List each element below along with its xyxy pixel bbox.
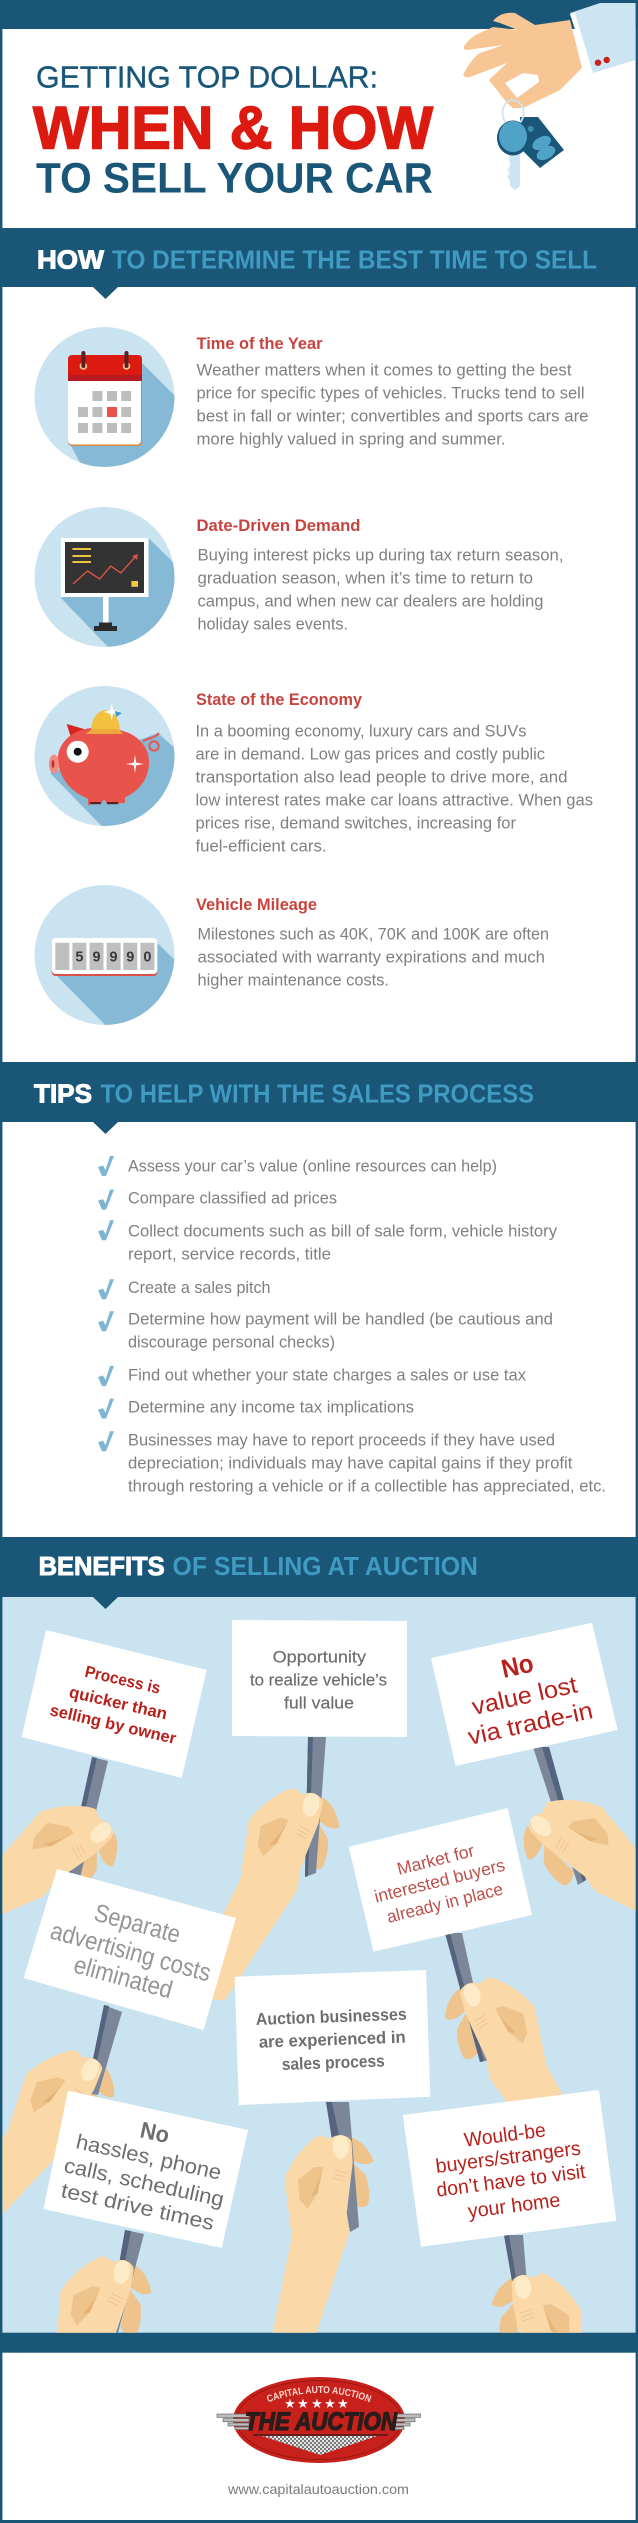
text block: tips list: Determine how payment will be handled (be cautious and [128, 1311, 553, 1329]
sign: auction businesses [235, 1970, 430, 2105]
sign: opportunity: Opportunity [273, 1648, 367, 1667]
icon: odometer [34, 885, 174, 1025]
text block: tips list: discourage personal checks) [128, 1334, 335, 1352]
sign: process is quicker: Process is [83, 1663, 162, 1698]
section header: benefits of selling at auction: OF SELLING AT AUCTION [172, 1551, 478, 1581]
text block: vehicle mileage [196, 896, 549, 989]
text block: state of the economy: are in demand. Low gas prices and costly public [196, 746, 545, 764]
icon: odometer: 9 [92, 950, 101, 966]
sign: opportunity: full value [284, 1693, 354, 1712]
hand and sign stick: top right [524, 1747, 636, 1911]
section header: benefits of selling at auction: BENEFITS [39, 1551, 165, 1581]
logo: capital auto auction: ★ [297, 2396, 309, 2411]
text block: tips list: depreciation; individuals may have capital gains if they profit [128, 1455, 573, 1473]
sign: auction businesses: sales process [281, 2051, 385, 2074]
sign: separate advertising costs: eliminated [71, 1951, 176, 2004]
cuff [570, 3, 636, 73]
logo: capital auto auction: ★ [284, 2396, 296, 2411]
sign: separate advertising costs [24, 1869, 236, 2030]
logo: capital auto auction: ★ [337, 2396, 349, 2411]
section header: how to determine the best time to sell: HOW [37, 244, 104, 274]
icons: check marks [98, 1156, 114, 1451]
text block: tips list: Determine any income tax implications [128, 1399, 414, 1417]
text block: date-driven demand: Buying interest picks up during tax return season, [198, 546, 564, 564]
text block: state of the economy: low interest rates make car loans attractive. When gas [196, 792, 593, 810]
text: website: www.capitalautoauction.com [227, 2481, 409, 2497]
text block: time of the year: Weather matters when it comes to getting the best [196, 361, 572, 379]
text block: time of the year: Time of the Year [196, 335, 323, 353]
panel: best time to sell [2, 287, 636, 1062]
sign: no hassles [44, 2091, 248, 2248]
text block: tips list: Businesses may have to report proceeds if they have used [128, 1432, 555, 1450]
sign: process is quicker: selling by owner [48, 1701, 178, 1748]
sign: would-be buyers: don’t have to visit [435, 2161, 587, 2202]
text block: state of the economy: In a booming economy, luxury cars and SUVs [196, 723, 526, 741]
panel: footer [2, 2352, 636, 2520]
sign: would-be buyers: your home [467, 2189, 562, 2223]
title line: to sell your car: TO SELL YOUR CAR [36, 155, 433, 203]
text block: tips list: report, service records, title [128, 1246, 331, 1264]
sign: separate advertising costs: advertising costs [47, 1917, 214, 1987]
text block: state of the economy: fuel-efficient cars. [196, 837, 326, 855]
panel: benefits illustration [2, 1597, 636, 2333]
text block: tips list: Create a sales pitch [128, 1279, 270, 1297]
icon: hand holding car keys [463, 3, 636, 190]
sign: separate advertising costs: Separate [91, 1899, 183, 1949]
sign: process is quicker: quicker than [67, 1683, 169, 1723]
sign: would-be buyers [403, 2090, 616, 2247]
hand and sign stick: advertising costs [2, 2005, 122, 2215]
sign: market for interested buyers: Market for [395, 1840, 476, 1879]
text block: state of the economy: prices rise, demand switches, increasing for [196, 815, 516, 833]
sign: opportunity: to realize vehicle’s [250, 1670, 387, 1689]
hand and sign stick: top centre [212, 1737, 340, 2000]
sign: no hassles: No [138, 2116, 172, 2148]
text block: tips list: Compare classified ad prices [128, 1190, 337, 1208]
sign: no hassles: calls, scheduling [62, 2154, 226, 2212]
icon: odometer: 9 [110, 950, 118, 966]
text block: vehicle mileage: Milestones such as 40K, 70K and 100K are often [198, 925, 549, 943]
sign: market for interested buyers: interested buyers [372, 1855, 507, 1907]
text block: tips list: Assess your car’s value (online resources can help) [128, 1158, 497, 1176]
text block: vehicle mileage: associated with warranty expirations and much [198, 948, 545, 966]
icon: odometer: 5 [75, 950, 83, 966]
icon: presentation chart board [34, 507, 174, 647]
hand and sign stick: would-be buyers [492, 2235, 582, 2333]
hands holding sign sticks [2, 1737, 636, 2333]
text block: vehicle mileage: higher maintenance costs. [198, 971, 389, 989]
text block: tips list: Find out whether your state charges a sales or use tax [128, 1367, 527, 1385]
panel: title [2, 29, 636, 228]
text block: tips list [128, 1158, 606, 1496]
text block: state of the economy: transportation also lead people to drive more, and [196, 769, 568, 787]
text block: date-driven demand [196, 517, 564, 633]
text block: tips list: Collect documents such as bill of sale form, vehicle history [128, 1223, 558, 1241]
logo: capital auto auction: ★ [324, 2396, 336, 2411]
section header: how to determine the best time to sell: TO DETERMINE THE BEST TIME TO SELL [112, 244, 597, 274]
text block: date-driven demand: holiday sales events. [198, 615, 348, 633]
text block: date-driven demand: Date-Driven Demand [196, 517, 360, 535]
text block: date-driven demand: campus, and when new car dealers are holding [198, 592, 544, 610]
text block: tips list: through restoring a vehicle or if a collectible has appreciated, etc. [128, 1478, 606, 1496]
icon: odometer: 9 [126, 950, 134, 966]
logo: capital auto auction: CAPITAL AUTO AUCTION [267, 2386, 372, 2402]
text block: time of the year: best in fall or winter; convertibles and sports cars are [196, 407, 588, 425]
sign: market for interested buyers [349, 1808, 532, 1952]
title line: getting top dollar: GETTING TOP DOLLAR: [36, 59, 378, 94]
sign: no hassles: hassles, phone [74, 2130, 223, 2185]
icon: calendar [34, 327, 174, 467]
sign: no hassles: test drive times [59, 2179, 216, 2235]
sign: no value lost: via trade-in [465, 1697, 595, 1751]
hand and sign stick: market for buyers [444, 1933, 563, 2102]
text block: state of the economy: State of the Economy [196, 691, 363, 709]
text block: time of the year: more highly valued in spring and summer. [196, 430, 506, 448]
sign: no value lost: value lost [469, 1671, 580, 1721]
logo: capital auto auction: ★ [311, 2396, 323, 2411]
text block: vehicle mileage: Vehicle Mileage [196, 896, 317, 914]
sign: auction businesses: are experienced in [258, 2028, 406, 2052]
sign: opportunity [232, 1620, 407, 1737]
sign: no value lost [431, 1623, 618, 1766]
sign: process is quicker [22, 1630, 207, 1778]
sign: would-be buyers: buyers/strangers [434, 2138, 582, 2178]
logo: capital auto auction: THE AUCTION [245, 2408, 398, 2436]
hand and sign stick: no hassles [56, 2230, 152, 2333]
sign: auction businesses: Auction businesses [255, 2005, 407, 2029]
section header: benefits of selling at auction [39, 1551, 478, 1581]
hand and sign stick: auction businesses [272, 2102, 374, 2333]
sign: no value lost: No [498, 1648, 536, 1684]
section header: tips to help with the sales process: TIPS [34, 1078, 92, 1108]
text block: date-driven demand: graduation season, when it’s time to return to [198, 569, 533, 587]
text block: time of the year [196, 335, 588, 448]
icon: odometer: 0 [143, 950, 151, 966]
sign: would-be buyers: Would-be [463, 2119, 547, 2152]
logo: capital auto auction [216, 2377, 421, 2463]
text block: state of the economy [196, 691, 593, 855]
title line: when and how: WHEN & HOW [33, 93, 434, 161]
panel: tips checklist [2, 1122, 636, 1537]
sign: market for interested buyers: already in place [385, 1879, 505, 1927]
text block: time of the year: price for specific types of vehicles. Trucks tend to sell [196, 384, 584, 402]
icon: piggy bank with coin [34, 686, 174, 826]
section header: tips to help with the sales process: TO HELP WITH THE SALES PROCESS [100, 1078, 534, 1108]
hand and sign stick: top left [2, 1757, 118, 1914]
